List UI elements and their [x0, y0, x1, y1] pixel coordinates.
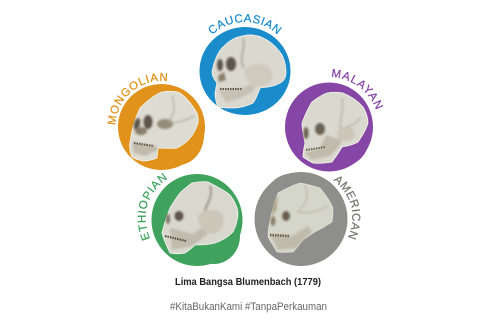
blob: grey: [254, 172, 348, 266]
label: MONGOLIAN: MONGOLIAN: [107, 72, 168, 125]
panel: American: [254, 172, 360, 266]
label: MALAYAN: MALAYAN: [332, 68, 384, 110]
panel: Caucasian: [200, 14, 290, 115]
skull: Caucasian: [212, 35, 286, 108]
skull: Malayan: [302, 92, 368, 163]
panel: Ethiopian: [138, 172, 242, 266]
hashtags: #KitaBukanKami #TanpaPerkauman: [170, 301, 327, 313]
blob: orange: [118, 84, 205, 170]
panel: Malayan: [285, 68, 384, 172]
blob: green: [152, 174, 242, 266]
caption: Lima Bangsa Blumenbach (1779): [175, 276, 321, 288]
label: ETHIOPIAN: ETHIOPIAN: [138, 172, 168, 241]
skull: American: [268, 183, 333, 252]
label: CAUCASIAN: CAUCASIAN: [208, 14, 282, 34]
blob: blue: [200, 27, 290, 115]
skull: Mongolian: [130, 91, 198, 161]
blob: purple: [285, 82, 373, 172]
panel: Mongolian: [107, 72, 205, 170]
skull: Ethiopian: [162, 182, 238, 254]
label: AMERICAN: AMERICAN: [333, 176, 360, 240]
